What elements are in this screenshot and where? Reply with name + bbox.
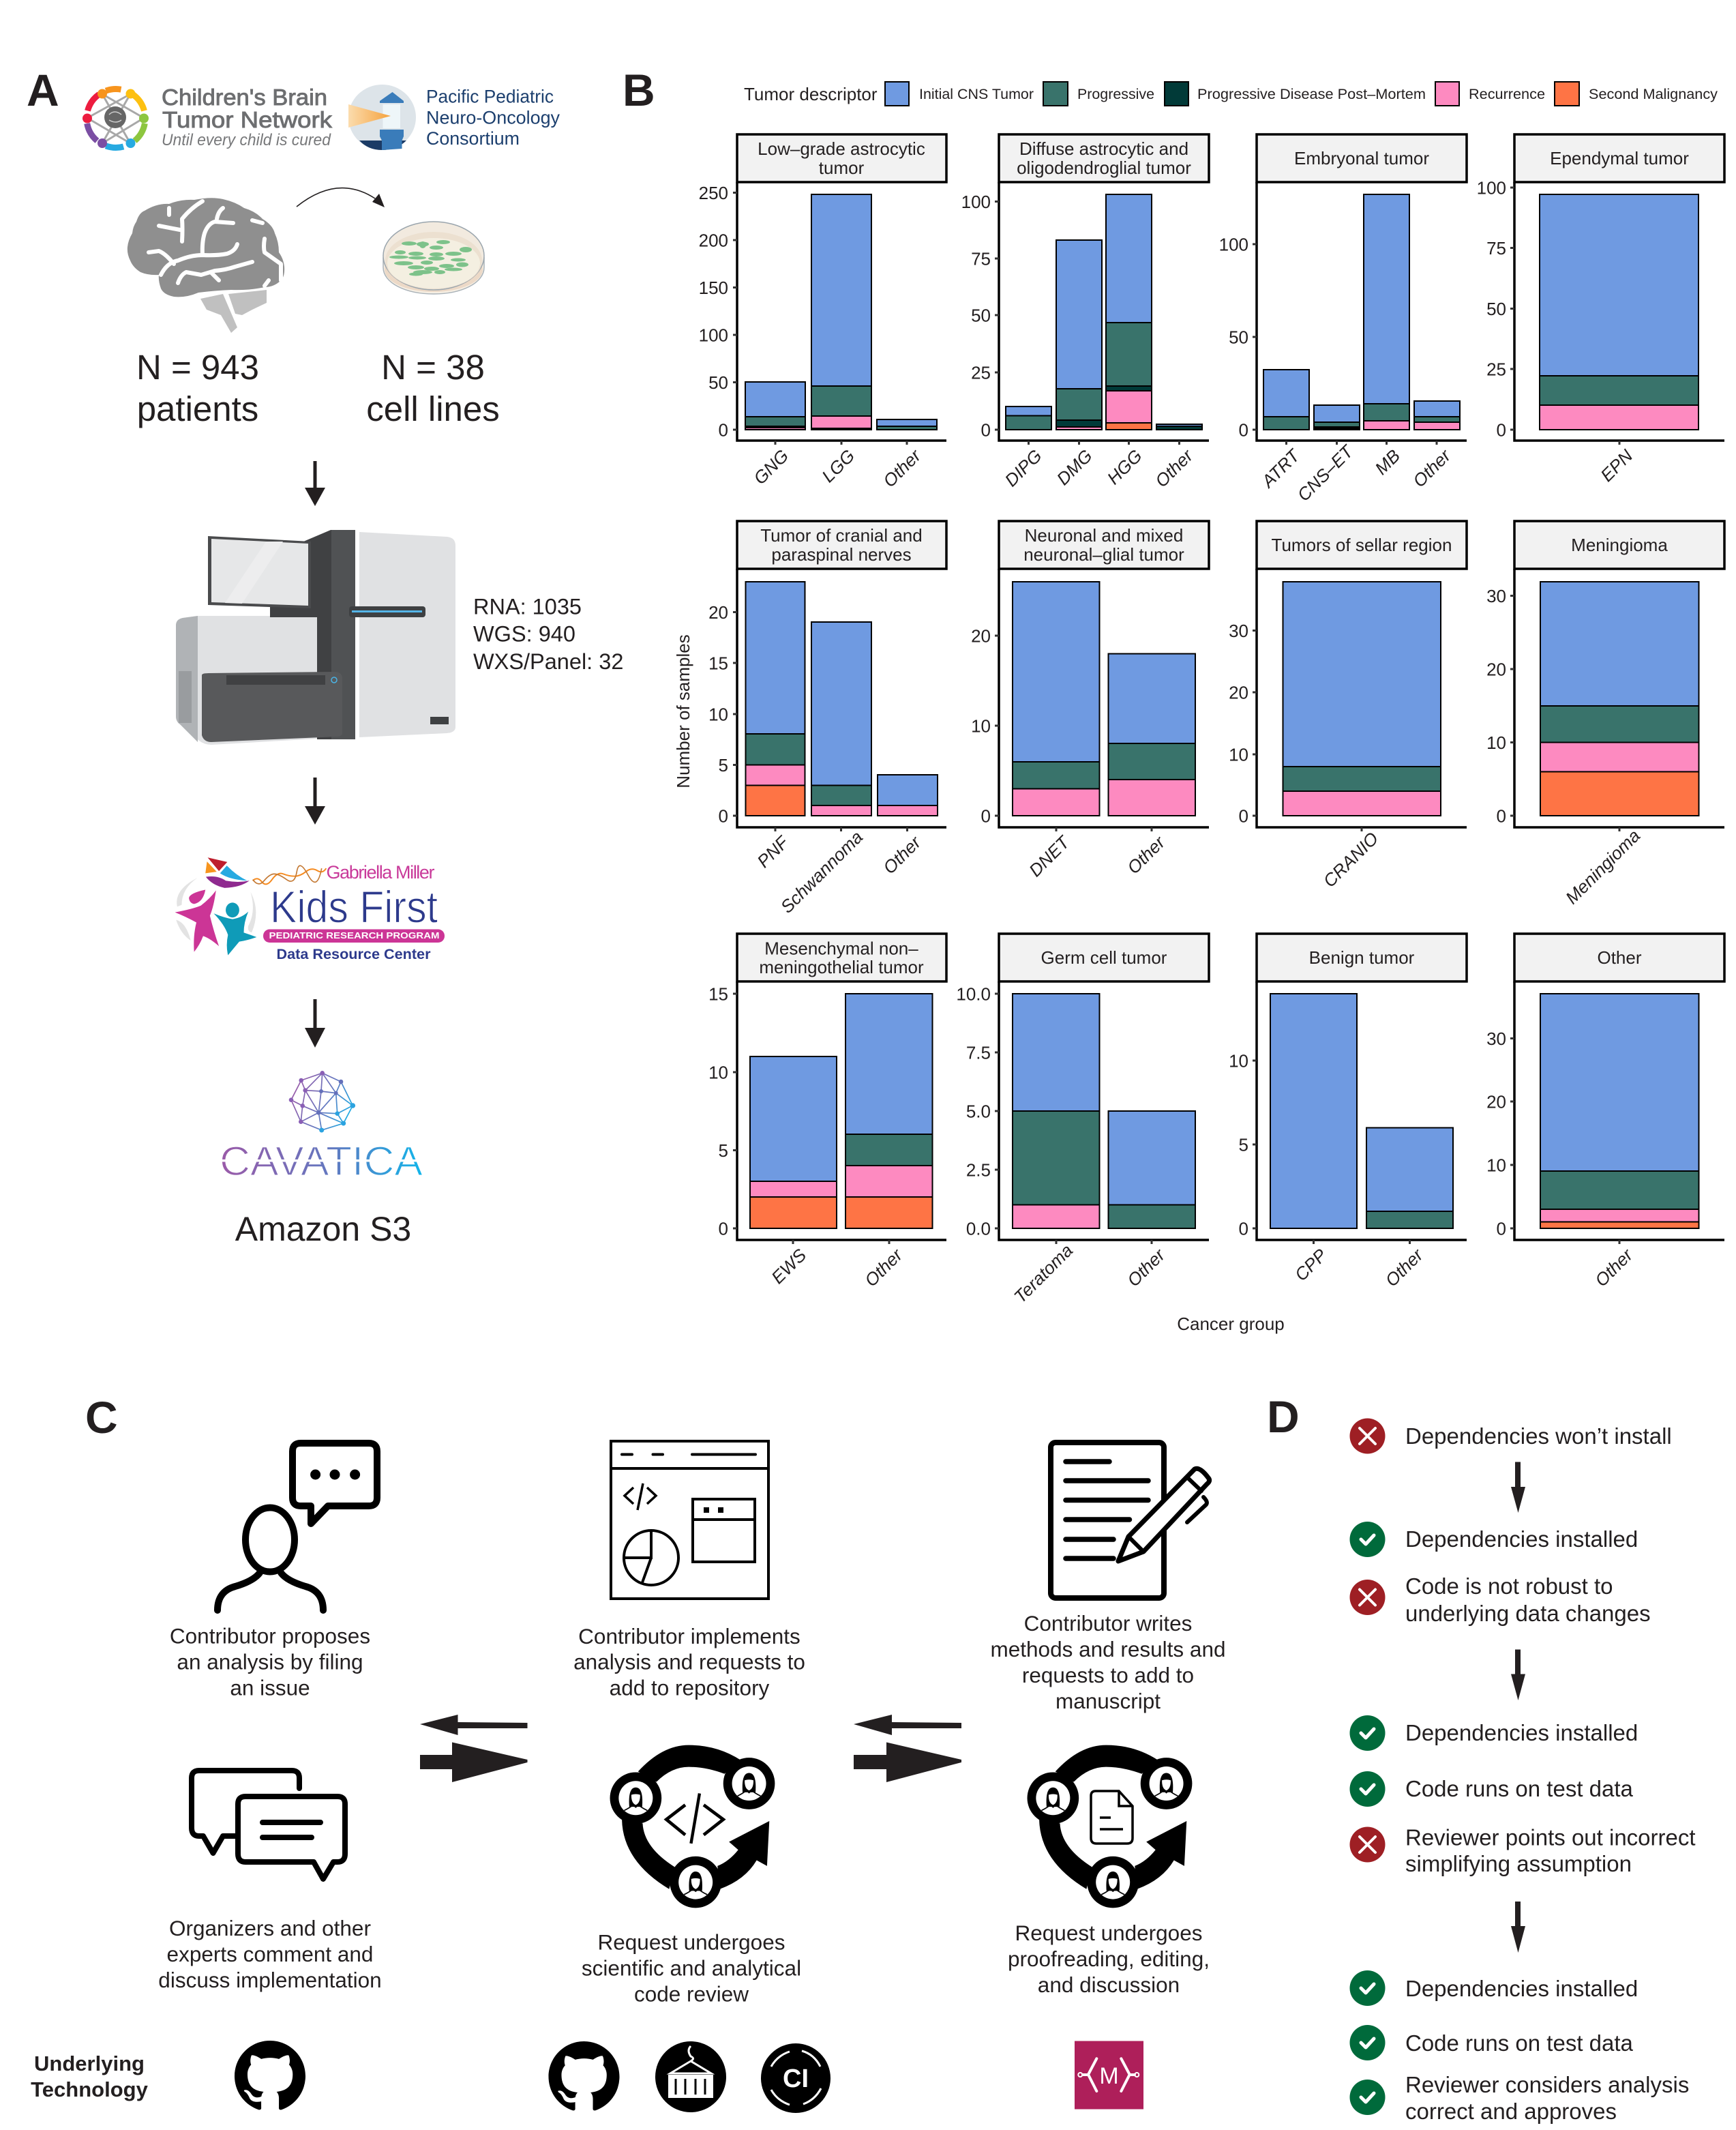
checklist: round 3: Reviewer points out incorrect (1405, 1825, 1696, 1850)
chart: Embryonal tumor: MB (1371, 445, 1404, 479)
text: step 1: an issue (230, 1675, 310, 1700)
text: underlying technology: Technology (31, 2077, 149, 2101)
text: patient count: N = 943 (136, 348, 259, 387)
chart: Meningioma (1486, 521, 1724, 908)
logo: Gabriella Miller Kids First: PEDIATRIC RESEARCH PROGRAM (269, 931, 439, 941)
chart: Tumor of cranial and paraspinal nerves (708, 521, 946, 917)
chart: Tumor of cranial and paraspinal nerves: 10 (708, 704, 728, 724)
icon: code window (611, 1441, 768, 1599)
text: step 5: requests to add to (1022, 1663, 1194, 1687)
icon: GitHub (235, 2041, 305, 2110)
arrow: brain to cell culture (297, 188, 385, 207)
chart: Ependymal tumor: 25 (1486, 359, 1506, 379)
logo: Cavatica (218, 1071, 424, 1184)
logo: Manubot (1075, 2041, 1143, 2109)
arrows: first exchange (420, 1715, 528, 1782)
text: step 2 (573, 1624, 805, 1700)
text: step 3: experts comment and (167, 1942, 373, 1966)
chart: Low-grade astrocytic tumor: LGG (818, 445, 858, 486)
checklist: round 2: Code is not robust to (1405, 1573, 1613, 1599)
x axis title: Cancer group (1177, 1314, 1285, 1334)
chart: Tumor of cranial and paraspinal nerves: paraspinal nerves (771, 544, 912, 565)
chart: Benign tumor: Benign tumor (1309, 947, 1415, 968)
icon: document and pen (1051, 1443, 1210, 1598)
text: sample counts: WXS/Panel: 32 (473, 649, 623, 674)
arrow: round 3 to 4 (1511, 1902, 1525, 1953)
chart: Low-grade astrocytic tumor: GNG (749, 445, 792, 488)
panel D label: D (1267, 1391, 1300, 1442)
checklist: round 2 (1350, 1522, 1651, 1626)
chart: Neuronal and mixed neuronal-glial tumor: 0 (981, 806, 991, 827)
logo: Pacific Pediatric Neuro-Oncology Consortium: Neuro-Oncology (426, 108, 560, 128)
chart: Diffuse astrocytic and oligodendroglial tumor: HGG (1103, 445, 1146, 488)
text: step 1: an analysis by filing (177, 1649, 363, 1674)
chart: Other (1486, 934, 1724, 1290)
chart: Mesenchymal non-meningothelial tumor: meningothelial tumor (759, 957, 924, 977)
chart: Meningioma: Meningioma (1571, 535, 1668, 555)
chart: Benign tumor: 10 (1229, 1050, 1248, 1071)
chart: Embryonal tumor: 50 (1229, 327, 1248, 348)
chart: Ependymal tumor: 75 (1486, 238, 1506, 258)
chart: Benign tumor: CPP (1291, 1245, 1331, 1285)
text: step 4: Request undergoes (598, 1930, 785, 1955)
chart: Low-grade astrocytic tumor: 100 (699, 325, 728, 345)
chart: Other: Other (1591, 1244, 1637, 1290)
icon: brain (128, 198, 284, 333)
text: step 4: code review (634, 1982, 749, 2007)
chart: Tumors of sellar region: 0 (1239, 806, 1248, 827)
logo: Pacific Pediatric Neuro-Oncology Consortium (348, 85, 560, 150)
arrow: round 1 to 2 (1511, 1462, 1525, 1513)
chart: Ependymal tumor: 100 (1477, 177, 1506, 198)
chart: Tumor of cranial and paraspinal nerves: Schwannoma (777, 827, 867, 917)
text: step 2: analysis and requests to (573, 1649, 805, 1674)
text: step 5: methods and results and (991, 1637, 1225, 1661)
chart: Diffuse astrocytic and oligodendroglial tumor: DIPG (1001, 445, 1046, 490)
panel A label: A (27, 65, 59, 115)
icon: discussion bubbles (192, 1771, 345, 1879)
chart: Tumor of cranial and paraspinal nerves: 20 (708, 602, 728, 623)
chart: Embryonal tumor (1219, 134, 1467, 505)
chart: Mesenchymal non-meningothelial tumor: EWS (767, 1245, 811, 1288)
icon: code review cycle (610, 1745, 775, 1908)
checklist: round 4: correct and approves (1405, 2099, 1617, 2124)
chart: Low-grade astrocytic tumor: 200 (699, 231, 728, 251)
chart: Germ cell tumor: Germ cell tumor (1041, 947, 1167, 968)
logo: Gabriella Miller Kids First: Gabriella Miller (326, 862, 435, 883)
text: step 2: Contributor implements (578, 1624, 800, 1648)
chart: Neuronal and mixed neuronal-glial tumor: Neuronal and mixed (1025, 525, 1183, 546)
legend (744, 82, 1718, 106)
text: cell line count: cell lines (366, 389, 500, 428)
text: step 2: add to repository (610, 1675, 770, 1700)
chart: Low-grade astrocytic tumor: Other (879, 445, 925, 491)
chart: Embryonal tumor: ATRT (1257, 445, 1304, 492)
checklist: round 1 (1350, 1419, 1672, 1454)
arrow: to Cavatica (305, 999, 325, 1048)
chart: Mesenchymal non-meningothelial tumor: 5 (719, 1140, 728, 1161)
chart: Embryonal tumor: 100 (1219, 235, 1248, 255)
chart: Low-grade astrocytic tumor: tumor (819, 158, 865, 178)
chart: Ependymal tumor: 0 (1497, 420, 1506, 441)
chart: Mesenchymal non-meningothelial tumor: 10 (708, 1063, 728, 1083)
checklist: round 4: Dependencies installed (1405, 1976, 1638, 2001)
chart: Germ cell tumor: 10.0 (956, 983, 991, 1004)
chart: Low-grade astrocytic tumor: 50 (708, 372, 728, 393)
chart: Germ cell tumor: 0.0 (966, 1218, 991, 1239)
checklist: round 3 (1350, 1715, 1696, 1876)
chart: Benign tumor: Other (1381, 1244, 1428, 1290)
arrow: round 2 to 3 (1511, 1649, 1525, 1700)
chart: Diffuse astrocytic and oligodendroglial tumor: 0 (981, 420, 991, 441)
chart: Embryonal tumor: Embryonal tumor (1294, 148, 1429, 168)
chart: Mesenchymal non-meningothelial tumor: 0 (719, 1218, 728, 1239)
chart: Meningioma: 0 (1497, 806, 1506, 827)
chart: Other: 10 (1486, 1155, 1506, 1176)
text: step 6 (1008, 1921, 1210, 1997)
logo: Gabriella Miller Kids First: Kids First (270, 881, 438, 932)
chart: Germ cell tumor: 5.0 (966, 1101, 991, 1121)
logo: Cavatica: CAVATICA (220, 1138, 423, 1184)
chart: Ependymal tumor: Ependymal tumor (1550, 148, 1689, 168)
chart: Meningioma: 30 (1486, 586, 1506, 606)
text: cell line count: N = 38 (381, 348, 485, 387)
text: step 4: scientific and analytical (582, 1956, 801, 1981)
chart: Neuronal and mixed neuronal-glial tumor: Other (1123, 831, 1169, 878)
checklist: round 3: Dependencies installed (1405, 1720, 1638, 1745)
chart: Mesenchymal non-meningothelial tumor: Mesenchymal non– (764, 938, 918, 959)
chart: Germ cell tumor: Teratoma (1010, 1240, 1077, 1307)
text: step 3: discuss implementation (158, 1968, 382, 1992)
chart: Neuronal and mixed neuronal-glial tumor (971, 521, 1209, 881)
icon: person with speech bubble (218, 1443, 377, 1610)
chart: Mesenchymal non-meningothelial tumor: Other (860, 1244, 907, 1290)
chart: Diffuse astrocytic and oligodendroglial tumor: oligodendroglial tumor (1017, 158, 1191, 178)
chart: Meningioma: 10 (1486, 733, 1506, 753)
text: step 6: Request undergoes (1015, 1921, 1202, 1945)
chart: Other: Other (1597, 947, 1642, 968)
chart: Ependymal tumor (1477, 134, 1724, 486)
logo: Children's Brain Tumor Network (83, 85, 333, 149)
chart: Tumor of cranial and paraspinal nerves: 15 (708, 653, 728, 674)
text: step 6: proofreading, editing, (1008, 1947, 1210, 1971)
chart: Diffuse astrocytic and oligodendroglial tumor (961, 134, 1209, 491)
icon: GitHub (548, 2041, 619, 2110)
chart: Neuronal and mixed neuronal-glial tumor: 20 (971, 626, 991, 647)
icon: continuous integration: CI (783, 2065, 809, 2093)
chart: Other: 30 (1486, 1029, 1506, 1049)
chart: Tumors of sellar region: CRANIO (1319, 828, 1382, 891)
chart: Diffuse astrocytic and oligodendroglial tumor: Other (1151, 445, 1197, 491)
chart: Neuronal and mixed neuronal-glial tumor: neuronal–glial tumor (1023, 544, 1184, 565)
chart: Ependymal tumor: 50 (1486, 299, 1506, 319)
chart: Low-grade astrocytic tumor (699, 134, 946, 491)
chart: Other: 0 (1497, 1218, 1506, 1239)
legend: Second Malignancy (1589, 86, 1718, 102)
chart: Ependymal tumor: EPN (1596, 445, 1636, 486)
text: Amazon S3: Amazon S3 (235, 1210, 411, 1248)
chart: Tumor of cranial and paraspinal nerves: PNF (753, 831, 794, 872)
chart: Tumors of sellar region (1229, 521, 1467, 891)
chart: Benign tumor (1229, 934, 1467, 1290)
panel B label: B (623, 65, 655, 115)
chart: Mesenchymal non-meningothelial tumor (708, 934, 946, 1290)
checklist: round 2: Dependencies installed (1405, 1526, 1638, 1552)
icon: manuscript review cycle (1028, 1745, 1192, 1908)
logo: Children's Brain Tumor Network: Tumor Network (162, 107, 333, 132)
logo: Children's Brain Tumor Network: Children's Brain (162, 85, 327, 110)
logo: Gabriella Miller Kids First (175, 857, 445, 962)
icon: continuous integration (761, 2043, 830, 2113)
text: step 1 (170, 1623, 370, 1700)
chart: Embryonal tumor: 0 (1239, 420, 1248, 441)
chart: Tumor of cranial and paraspinal nerves: 5 (719, 755, 728, 775)
chart: Diffuse astrocytic and oligodendroglial tumor: Diffuse astrocytic and (1019, 138, 1188, 159)
arrow: to Kids First (305, 778, 325, 825)
checklist: round 4: Reviewer considers analysis (1405, 2072, 1689, 2097)
chart: Tumors of sellar region: 10 (1229, 745, 1248, 765)
legend: Progressive Disease Post–Mortem (1197, 86, 1426, 102)
chart: Low-grade astrocytic tumor: 0 (719, 420, 728, 441)
legend: Initial CNS Tumor (919, 86, 1034, 102)
text: sample counts: WGS: 940 (473, 622, 575, 647)
text: patient count: patients (137, 389, 258, 428)
chart: Diffuse astrocytic and oligodendroglial tumor: 25 (971, 363, 991, 383)
chart: Diffuse astrocytic and oligodendroglial tumor: 100 (961, 192, 991, 212)
text: step 3 (158, 1916, 382, 1992)
chart: Meningioma: 20 (1486, 659, 1506, 679)
logo: Pacific Pediatric Neuro-Oncology Consortium: Consortium (426, 128, 520, 149)
chart: Tumor of cranial and paraspinal nerves: Other (879, 831, 925, 878)
checklist: round 1: Dependencies won’t install (1405, 1423, 1672, 1449)
chart: Germ cell tumor: 7.5 (966, 1042, 991, 1063)
chart: Tumor of cranial and paraspinal nerves: Tumor of cranial and (760, 525, 923, 546)
chart: Benign tumor: 0 (1239, 1218, 1248, 1239)
chart: Tumors of sellar region: 30 (1229, 621, 1248, 641)
checklist: round 4 (1350, 1970, 1689, 2124)
logo: Manubot: M (1099, 2063, 1119, 2089)
icon: container (655, 2041, 726, 2112)
checklist: round 3: Code runs on test data (1405, 1776, 1634, 1801)
icon: petri dish (383, 222, 484, 294)
checklist: round 2: underlying data changes (1405, 1601, 1651, 1626)
chart: Diffuse astrocytic and oligodendroglial tumor: DMG (1053, 445, 1096, 489)
checklist: round 3: simplifying assumption (1405, 1851, 1632, 1876)
chart: Germ cell tumor: Other (1123, 1244, 1169, 1290)
text: cell line count (366, 348, 500, 428)
legend: Recurrence (1469, 86, 1545, 102)
text: step 5: Contributor writes (1024, 1611, 1192, 1636)
chart: Other: 20 (1486, 1091, 1506, 1112)
chart: Diffuse astrocytic and oligodendroglial tumor: 50 (971, 306, 991, 326)
icon: sequencer (176, 530, 455, 745)
chart: Neuronal and mixed neuronal-glial tumor: DNET (1025, 831, 1075, 881)
logo: Pacific Pediatric Neuro-Oncology Consortium: Pacific Pediatric (426, 86, 554, 106)
text: step 5 (991, 1611, 1225, 1713)
text: underlying technology (31, 2052, 149, 2101)
chart: Low-grade astrocytic tumor: Low–grade astrocytic (758, 138, 925, 159)
chart: Germ cell tumor (956, 934, 1209, 1307)
legend: Tumor descriptor (744, 84, 878, 104)
text: step 3: Organizers and other (169, 1916, 371, 1940)
chart: Tumor of cranial and paraspinal nerves: 0 (719, 806, 728, 827)
chart: Meningioma: Meningioma (1561, 825, 1644, 908)
y axis title: Number of samples (673, 634, 693, 788)
chart: Tumors of sellar region: 20 (1229, 682, 1248, 702)
chart: Germ cell tumor: 2.5 (966, 1159, 991, 1180)
chart: Diffuse astrocytic and oligodendroglial tumor: 75 (971, 248, 991, 269)
text: patient count (136, 348, 259, 428)
arrow: to sequencer (305, 461, 325, 506)
text: step 5: manuscript (1056, 1689, 1161, 1713)
chart: Neuronal and mixed neuronal-glial tumor: 10 (971, 716, 991, 737)
chart: Embryonal tumor: CNS–ET (1293, 441, 1358, 505)
text: step 4 (582, 1930, 801, 2007)
text: sample counts (473, 595, 623, 674)
logo: Children's Brain Tumor Network: Until every child is cured (162, 131, 331, 149)
text: step 1: Contributor proposes (170, 1623, 370, 1648)
text: step 6: and discussion (1038, 1972, 1180, 1997)
logo: Gabriella Miller Kids First: Data Resource Center (277, 947, 431, 962)
chart: Low-grade astrocytic tumor: 250 (699, 183, 728, 203)
checklist: round 4: Code runs on test data (1405, 2030, 1634, 2056)
chart: Benign tumor: 5 (1239, 1135, 1248, 1155)
panel C label: C (85, 1392, 118, 1443)
text: underlying technology: Underlying (34, 2052, 145, 2075)
chart: Embryonal tumor: Other (1409, 445, 1455, 491)
legend: Progressive (1077, 86, 1154, 102)
chart: Mesenchymal non-meningothelial tumor: 15 (708, 983, 728, 1004)
arrows: second exchange (854, 1715, 961, 1782)
text: sample counts: RNA: 1035 (473, 595, 582, 619)
chart: Low-grade astrocytic tumor: 150 (699, 278, 728, 298)
chart: Tumors of sellar region: Tumors of sellar region (1272, 535, 1452, 555)
